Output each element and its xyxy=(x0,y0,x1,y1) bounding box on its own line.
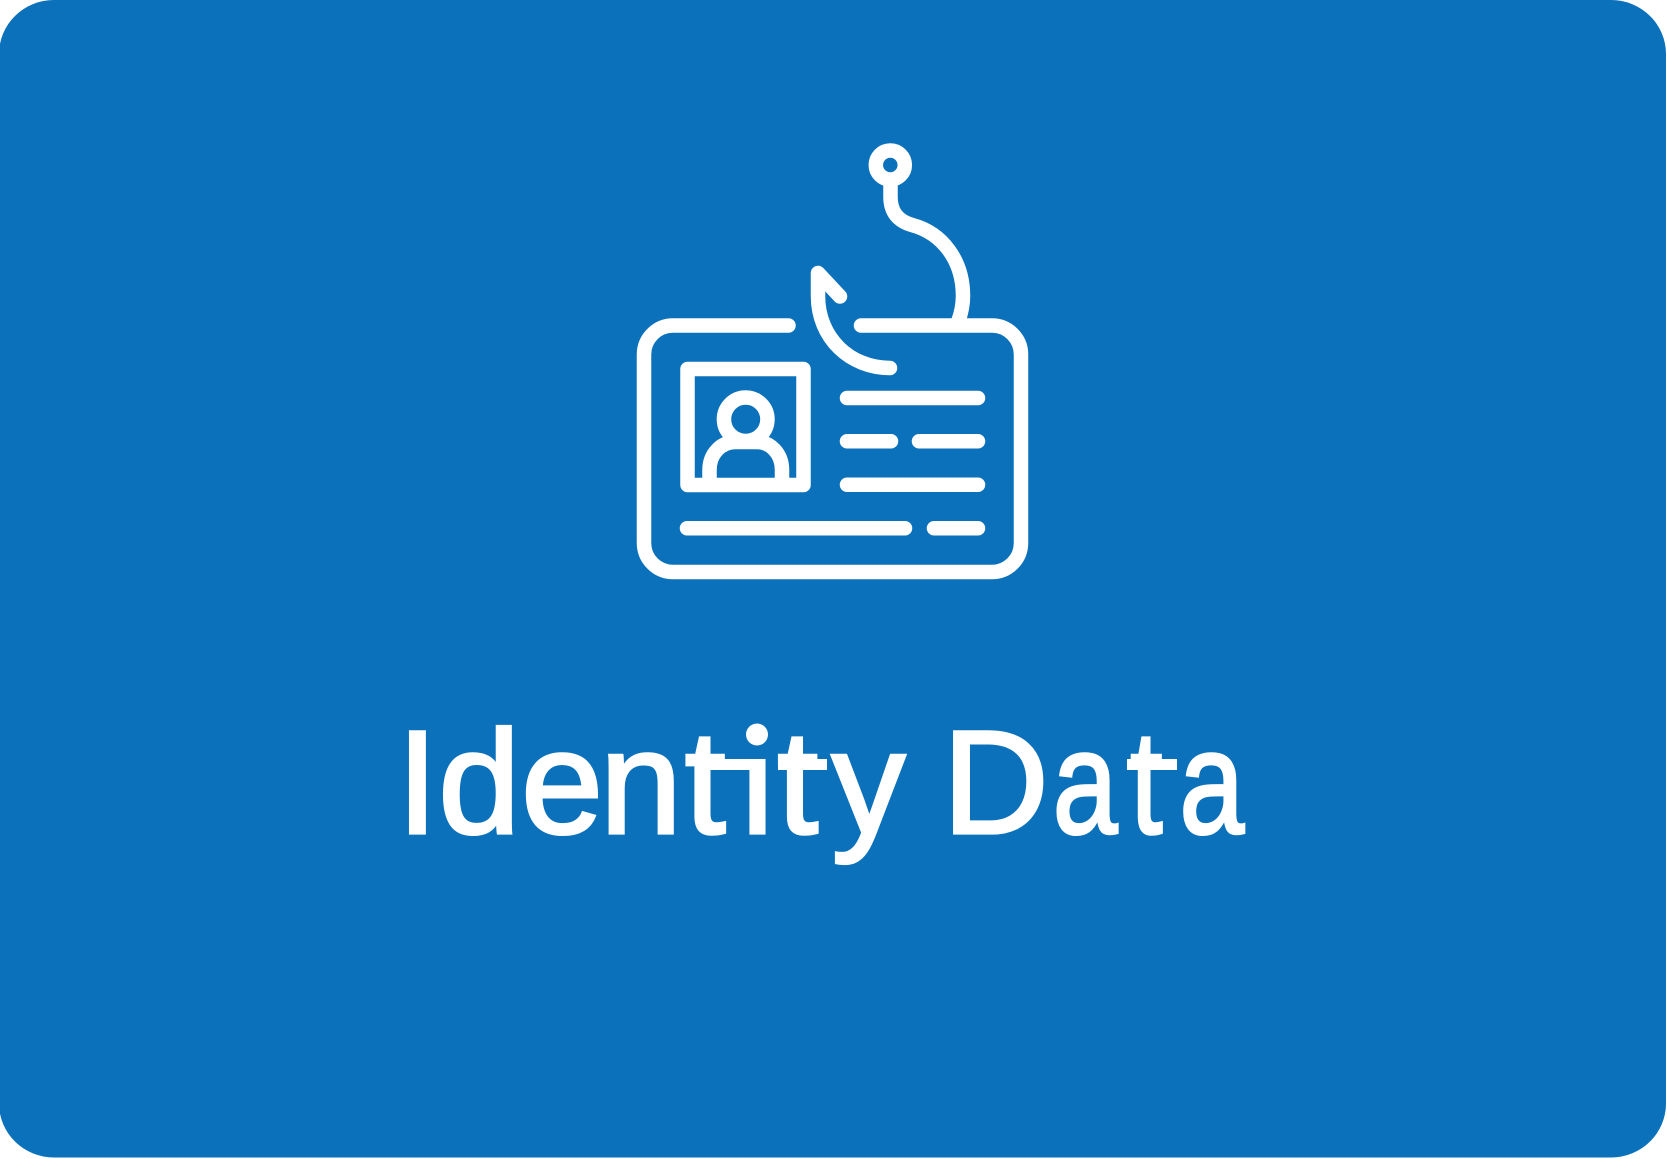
icon: phishing hook on ID card xyxy=(644,150,1021,572)
icon: ID photo portrait xyxy=(688,369,804,485)
icon: ID card outline xyxy=(644,326,1021,572)
icon: fish hook xyxy=(818,150,963,368)
title: Identity D xyxy=(397,701,1049,865)
icon: ID card text lines xyxy=(687,398,978,528)
title: ata xyxy=(1053,701,1244,865)
